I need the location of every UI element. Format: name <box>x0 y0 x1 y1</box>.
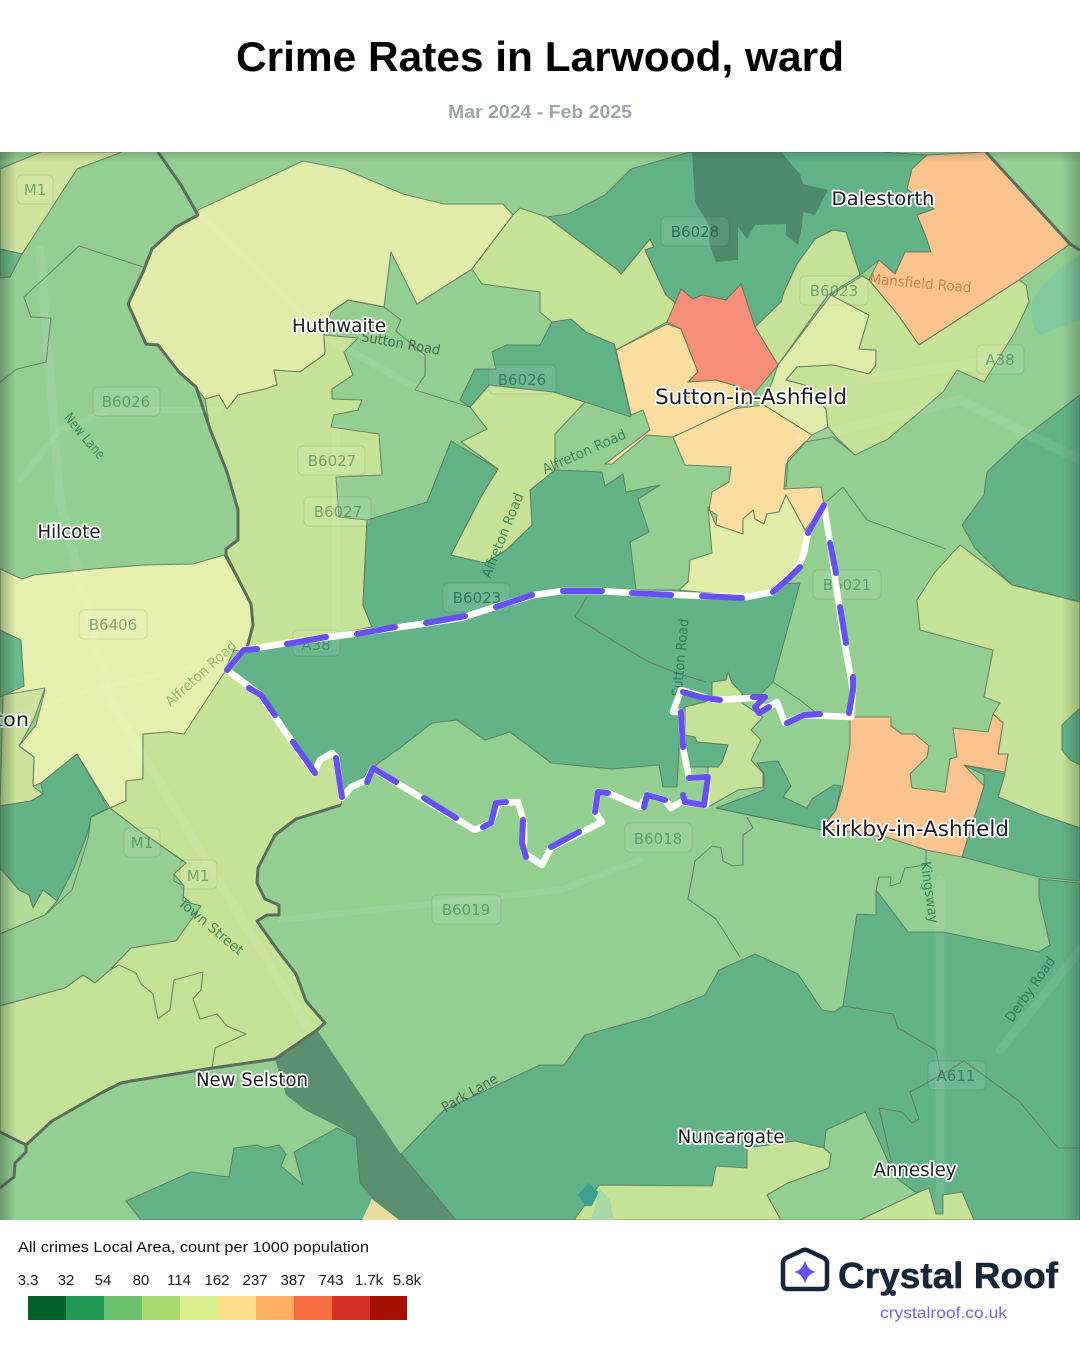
street names: New Lane <box>60 410 108 463</box>
street names: Alfreton Road <box>163 638 240 710</box>
legend scale values: 5.8k <box>393 1272 422 1289</box>
place labels: Annesley <box>874 1159 956 1181</box>
legend scale values: 1.7k <box>355 1272 384 1289</box>
subtitle: date range: Mar 2024 - Feb 2025 <box>448 102 632 122</box>
website url: crystalroof.co.uk <box>880 1305 1008 1322</box>
region: south of Sutton pale yellow <box>679 495 806 598</box>
place labels: Sutton-in-Ashfield <box>655 385 847 409</box>
road shields: B6019 <box>442 901 490 919</box>
region: B6026 dark green <box>460 319 631 417</box>
logo detail: dot under y <box>890 1290 896 1296</box>
region: small yellow bottom <box>362 1199 399 1220</box>
region: Hilcote B6406 yellow <box>0 555 253 808</box>
logo wordmark: Crystal Roof <box>838 1255 1059 1296</box>
region: far east dark patch <box>1062 708 1080 765</box>
street names: Sutton Road <box>670 618 692 697</box>
region: Annesley mid green <box>767 1112 919 1220</box>
street names: Mansfield Road <box>869 272 972 296</box>
region: east dark green <box>962 395 1080 602</box>
legend title: All crimes Local Area, count per 1000 population <box>18 1239 369 1256</box>
place labels <box>0 188 1009 1181</box>
region: Kirkby east dark band <box>962 765 1080 881</box>
logo: Crystal Roof <box>783 1250 1059 1322</box>
street names: Sutton Road <box>360 329 441 359</box>
region: Kirkby west light green <box>685 672 763 807</box>
region: west strip <box>0 249 22 278</box>
region: Sutton west pale orange <box>605 324 760 464</box>
place labels: Kirkby-in-Ashfield <box>821 817 1009 841</box>
legend scale values: 32 <box>58 1272 74 1289</box>
region: north strip light green <box>755 230 860 365</box>
street names: Alfreton Road <box>540 427 629 478</box>
place labels: Dalestorth <box>832 188 934 210</box>
region: pale strip east of centre <box>764 295 876 435</box>
legend <box>18 1239 422 1320</box>
road network <box>0 215 1080 1220</box>
legend scale values: 743 <box>318 1272 344 1289</box>
road shields: B6018 <box>634 830 682 848</box>
legend scale values: 114 <box>167 1272 191 1289</box>
street names: Park Lane <box>439 1071 501 1116</box>
region: south of ward dark band <box>716 761 841 830</box>
road shields: M1 <box>131 834 153 852</box>
region: far west dark green <box>0 630 24 697</box>
region: Selston west green <box>0 808 201 1006</box>
region: motorway dark wedge <box>275 1030 456 1220</box>
region: south-west dark green block <box>126 1128 379 1220</box>
legend scale values: 80 <box>133 1272 149 1289</box>
street names <box>60 272 1059 1116</box>
region: north dark green <box>547 152 934 327</box>
place labels: Huthwaite <box>292 315 386 337</box>
water body: teal diamond <box>578 1183 599 1206</box>
road shields: B6023 <box>810 282 858 300</box>
region: small dark patch in ward <box>685 735 728 767</box>
region: ward and west dark green <box>226 441 800 799</box>
region: Dalestorth peach high crime <box>869 152 1070 345</box>
street names: Town Street <box>174 894 247 959</box>
road shields: B6026 <box>102 393 150 411</box>
road shields: B6021 <box>823 576 871 594</box>
place labels: Hilcote <box>38 521 100 543</box>
region: central light green B6027 <box>205 335 382 660</box>
legend scale values: 3.3 <box>18 1272 38 1289</box>
region: Nuncargate light green <box>574 1141 831 1220</box>
map edge vignette <box>0 152 1080 1220</box>
region: Kirkby-in-Ashfield peach <box>822 714 1008 857</box>
road shields: B6028 <box>671 223 719 241</box>
street names: Derby Road <box>1002 954 1059 1025</box>
road shields: M1 <box>187 867 209 885</box>
street names: Alfreton Road <box>479 491 528 580</box>
legend scale values <box>18 1272 422 1289</box>
legend scale values: 54 <box>95 1272 111 1289</box>
region: east light green <box>917 545 1080 828</box>
region: north light green <box>472 208 678 350</box>
icon: house with star <box>783 1250 827 1289</box>
road shields: B6023 <box>453 589 501 607</box>
thick district boundaries <box>0 152 1080 1188</box>
region: south-west dark green <box>0 754 108 908</box>
region: Skegby-side light green <box>0 688 45 806</box>
street names: Kingsway <box>917 861 941 924</box>
legend colour bar <box>28 1296 407 1320</box>
region: Sutton centre red-orange highest crime <box>667 284 778 395</box>
region: large southern dark green <box>401 879 1080 1220</box>
road shields: B6026 <box>498 371 546 389</box>
region: teal reservoir corner <box>1031 255 1080 335</box>
region: Alfreton Road light strip <box>451 385 585 563</box>
legend scale values: 237 <box>242 1272 268 1289</box>
region: south-west light patch <box>0 868 57 934</box>
road shields: A38 <box>985 351 1015 369</box>
place labels: Nuncargate <box>678 1126 784 1148</box>
road shields: M1 <box>24 181 46 199</box>
ward boundary: white line <box>227 505 853 865</box>
road shields: A611 <box>937 1067 975 1085</box>
title: Crime Rates in Larwood, ward <box>236 33 844 80</box>
thin boundary lines <box>0 246 1080 1177</box>
road shields: B6027 <box>314 503 362 521</box>
legend scale values: 387 <box>280 1272 306 1289</box>
road shields: B6406 <box>89 616 137 634</box>
road shields <box>17 175 1024 1090</box>
region: south-east light green <box>860 1188 974 1220</box>
road shields: A38 <box>301 636 331 654</box>
region: north-west corner <box>0 152 122 254</box>
region: Huthwaite <box>128 161 513 409</box>
choropleth map <box>0 152 1080 1220</box>
region: south central light green <box>0 670 342 1145</box>
legend scale values: 162 <box>204 1272 230 1289</box>
ward boundary: purple dashes <box>227 505 853 857</box>
region: darkest green north <box>692 152 828 262</box>
region: east of Sutton light green <box>786 276 1029 455</box>
place labels: New Selston <box>196 1069 308 1091</box>
road shields: B6027 <box>308 452 356 470</box>
region: Sutton centre pale orange <box>673 405 824 534</box>
